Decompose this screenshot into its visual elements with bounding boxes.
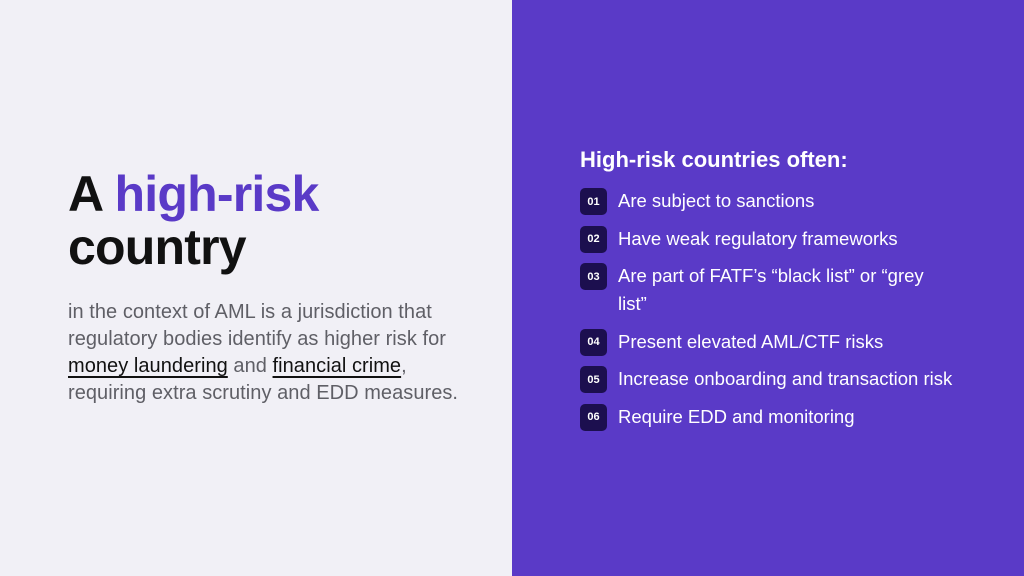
item 04: Present elevated AML/CTF risks [618, 330, 883, 352]
heading: list: High-risk countries often: [580, 147, 848, 172]
list of traits [580, 188, 952, 431]
item 01 [580, 188, 814, 215]
panel: right purple [512, 0, 1024, 576]
item 04: 04 [587, 336, 600, 348]
item 02 [580, 226, 898, 253]
text block: definition: in the context of AML is a jurisdiction that [68, 301, 432, 323]
title: country [68, 219, 246, 275]
item 06: 06 [587, 411, 600, 423]
item 05: 05 [587, 374, 600, 386]
item 02: 02 [587, 233, 600, 245]
item 04 [580, 329, 883, 356]
text block: definition: requiring extra scrutiny and EDD measures. [68, 382, 458, 404]
item 06 [580, 404, 855, 431]
text block: definition: money laundering and financial crime, [68, 355, 407, 377]
item 03 [580, 263, 924, 314]
text block: definition [68, 301, 458, 404]
item 01: 01 [587, 196, 600, 208]
title: A high-risk [68, 166, 318, 222]
title [68, 166, 320, 275]
item 06: Require EDD and monitoring [618, 406, 855, 426]
item 01: Are subject to sanctions [618, 190, 814, 211]
item 05: Increase onboarding and transaction risk [618, 368, 952, 389]
item 03: 03 [587, 270, 600, 282]
item 03: Are part of FATF’s “black list” or “grey [618, 265, 924, 286]
item 02: Have weak regulatory frameworks [618, 228, 898, 248]
text block: definition: regulatory bodies identify as higher risk for [68, 328, 446, 350]
item 03: list” [618, 293, 647, 314]
item 05 [580, 366, 952, 393]
